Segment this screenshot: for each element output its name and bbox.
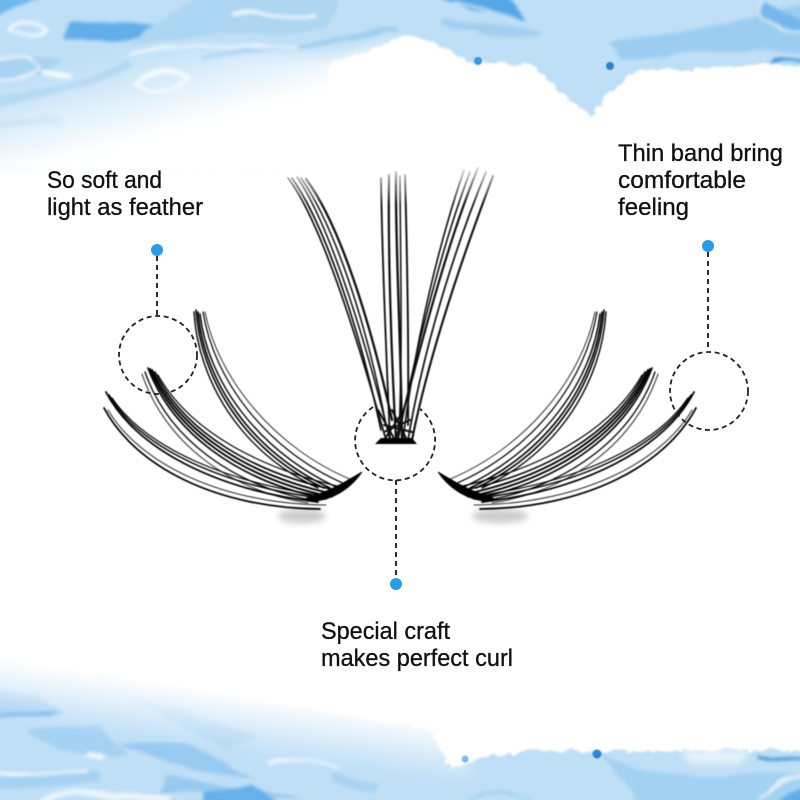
marker dot <box>151 244 163 256</box>
soft fade over the left of the top band <box>0 40 400 180</box>
panel: bottom blue marble band <box>0 630 800 800</box>
callout: special craft <box>321 407 513 672</box>
leader line <box>156 256 158 316</box>
label text <box>618 140 783 221</box>
callout: thin band <box>618 140 783 430</box>
label text: Thin band bring <box>618 140 783 167</box>
left lash fan <box>104 310 362 509</box>
callout: so soft and light as feather <box>47 167 203 394</box>
dashed circle <box>670 352 748 430</box>
label text <box>47 167 203 221</box>
leader line <box>707 252 709 351</box>
label text: So soft and <box>47 167 162 194</box>
dashed circle <box>355 407 435 480</box>
label text <box>321 618 513 672</box>
band <box>375 438 417 444</box>
soft lash shadows <box>278 509 528 523</box>
label text: Special craft <box>321 618 450 645</box>
leader line <box>395 480 397 578</box>
label text: makes perfect curl <box>321 645 513 672</box>
label text: feeling <box>618 194 689 221</box>
label text: comfortable <box>618 167 746 194</box>
label text: light as feather <box>47 194 203 221</box>
right lash fan <box>438 310 696 509</box>
soft fade over the top of the bottom band <box>0 630 480 800</box>
marker dot <box>390 578 402 590</box>
panel: top blue marble band <box>0 0 800 180</box>
center lash cluster <box>288 168 493 444</box>
dashed circle <box>119 316 197 394</box>
marker dot <box>702 240 714 252</box>
